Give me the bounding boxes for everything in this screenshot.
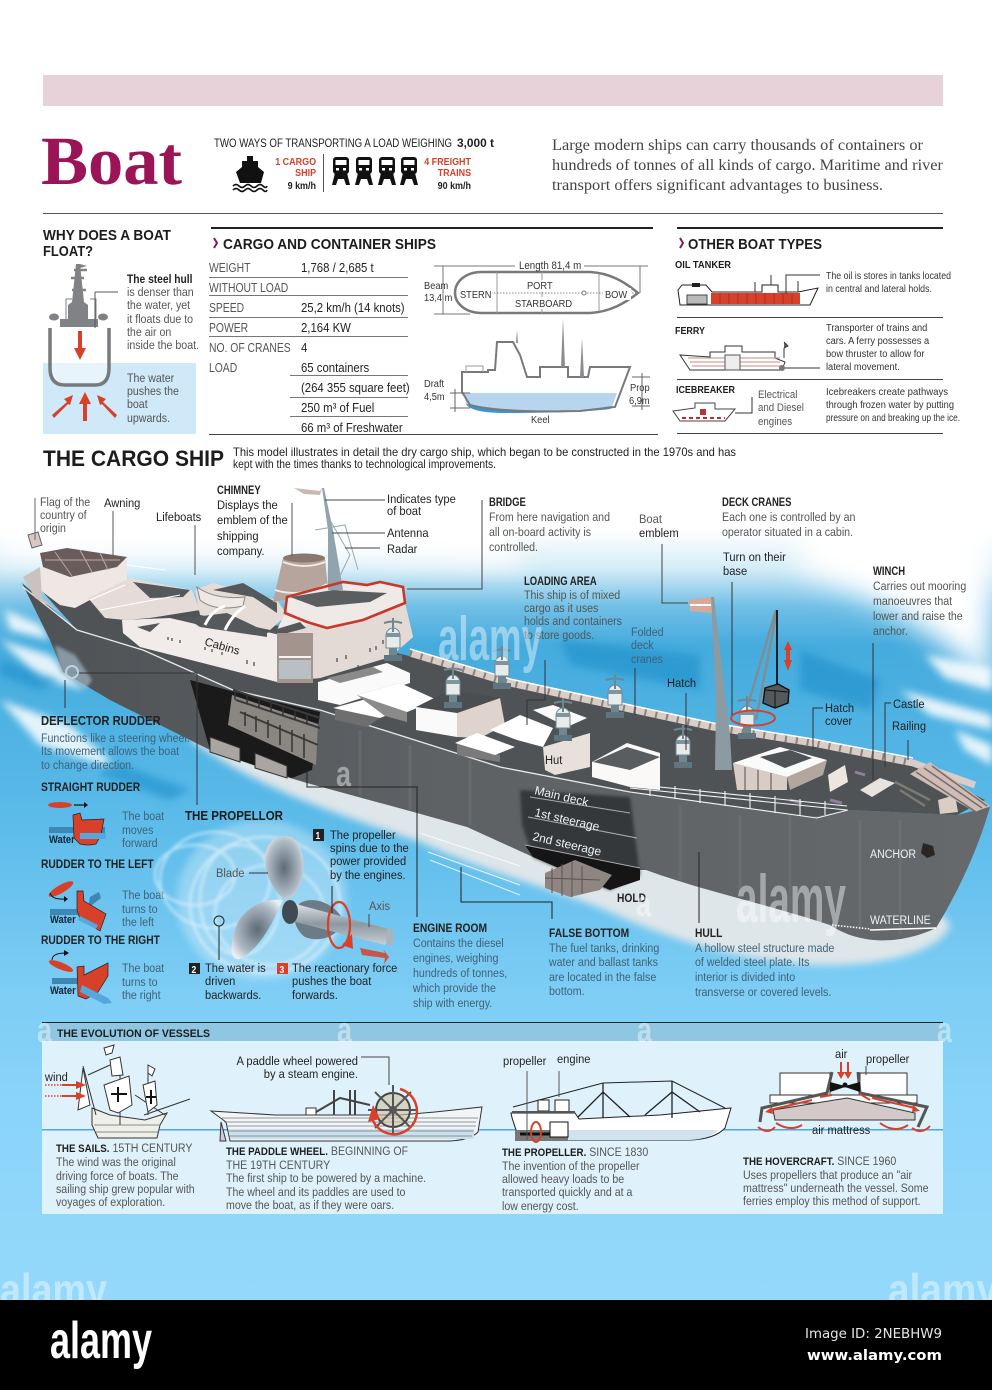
data table: 2,164 KW bbox=[301, 320, 352, 335]
icebreaker: Electrical bbox=[758, 390, 797, 401]
label: mast: Indicates type bbox=[387, 494, 456, 506]
the propellor diagram: power provided bbox=[330, 856, 406, 868]
data table: 1,768 / 2,685 t bbox=[301, 260, 374, 275]
ship plan diagram bbox=[424, 261, 648, 314]
watermarks: a bbox=[937, 1009, 953, 1050]
hull bbox=[22, 583, 990, 940]
chimney bbox=[273, 555, 328, 602]
label: hatch bbox=[667, 678, 696, 750]
foredeck bbox=[733, 747, 990, 814]
wake lines bbox=[420, 833, 520, 895]
ship plan diagram: PORT bbox=[527, 281, 553, 292]
rudder: right: RUDDER TO THE RIGHT bbox=[41, 934, 160, 947]
the propellor diagram: driven bbox=[205, 976, 235, 988]
rudder: left: Water bbox=[50, 914, 76, 926]
cargo ship intro text: This model illustrates in detail the dry cargo ship, which began to be constructed in the 1970s and has bbox=[233, 445, 736, 459]
rudder: straight bbox=[41, 781, 165, 850]
label: loading area: LOADING AREA bbox=[524, 575, 597, 588]
panel: why does a boat float: pushes the bbox=[127, 385, 179, 398]
watermarks bbox=[0, 605, 992, 1316]
label: deflector rudder: Its movement allows the boat bbox=[41, 745, 180, 758]
text: hovercraft: mattress" underneath the vessel. Some bbox=[743, 1182, 929, 1195]
ship plan diagram: 13,4 m bbox=[424, 293, 452, 304]
panel: evolution of vessels bbox=[42, 1022, 943, 1214]
pink header band bbox=[43, 75, 943, 106]
text: hovercraft: ferries employ this method of support. bbox=[743, 1195, 921, 1208]
ship wake foam bbox=[190, 720, 950, 965]
label: hull bbox=[695, 852, 834, 999]
rudder: right: the right bbox=[122, 989, 161, 1002]
main ship illustration: Cabins bbox=[203, 636, 241, 658]
label: bridge: From here navigation and bbox=[489, 511, 610, 524]
panel: why does a boat float bbox=[43, 227, 199, 434]
propeller ship bbox=[503, 1054, 731, 1142]
water text: The water bbox=[127, 372, 174, 385]
label: engine room: engines, weighing bbox=[413, 952, 498, 965]
hull text: The steel hull bbox=[127, 273, 193, 286]
oil tanker: The oil is stores in tanks located bbox=[826, 270, 951, 282]
label: false bottom bbox=[461, 867, 659, 998]
icebreaker: through frozen water by putting bbox=[826, 399, 954, 411]
intro paragraph: Large modern ships can carry thousands of containers or bbox=[552, 137, 924, 154]
panel: why does a boat float: the air on bbox=[127, 326, 171, 339]
label: folded deck cranes: Folded bbox=[631, 626, 664, 639]
text: propeller bbox=[502, 1146, 648, 1213]
label: lifeboats: Lifeboats bbox=[156, 512, 201, 524]
watermarks: alamy bbox=[0, 1264, 107, 1316]
midship blocks bbox=[318, 663, 660, 790]
transport comparison: 90 km/h bbox=[438, 180, 471, 192]
main ship illustration: ANCHOR bbox=[870, 848, 916, 861]
label: loading area: to store goods. bbox=[524, 629, 594, 642]
rudder: right: turns to bbox=[122, 976, 158, 989]
hovercraft: air mattress bbox=[812, 1125, 870, 1137]
rudder bbox=[55, 645, 92, 690]
label: chimney: emblem of the bbox=[217, 515, 288, 527]
ship side profile diagram: Prop bbox=[630, 383, 650, 394]
mast bbox=[294, 488, 322, 495]
transport comparison: 9 km/h bbox=[288, 180, 316, 192]
panel: why does a boat float: FLOAT? bbox=[43, 243, 93, 260]
main ship illustration: WATERLINE bbox=[870, 914, 931, 927]
rudder: straight: forward bbox=[122, 837, 158, 850]
label: folded deck cranes: cranes bbox=[631, 653, 663, 666]
image id: Image ID: 2NEBHW9 bbox=[805, 1327, 942, 1342]
data table: 65 containers bbox=[301, 360, 369, 375]
panel: why does a boat float: it floats due to bbox=[127, 313, 193, 326]
label: flag bbox=[28, 496, 90, 548]
bridge red outline bbox=[285, 582, 405, 628]
watermarks: a bbox=[637, 1009, 653, 1050]
aft deck bbox=[88, 578, 200, 620]
label: railing: Railing bbox=[892, 721, 926, 733]
the propellor diagram: 2 bbox=[191, 964, 196, 975]
label: hull: of welded steel plate. Its bbox=[695, 956, 810, 969]
label: hull: HULL bbox=[695, 927, 723, 940]
label: deck cranes: operator situated in a cabin. bbox=[722, 526, 853, 539]
icon: cargo ship bbox=[233, 156, 267, 192]
label: deck cranes: Each one is controlled by an bbox=[722, 511, 855, 524]
the propellor diagram: The propeller bbox=[330, 830, 396, 842]
panel: why does a boat float: upwards. bbox=[127, 412, 170, 425]
anchor bbox=[921, 843, 935, 858]
rudder: straight: STRAIGHT RUDDER bbox=[41, 781, 140, 794]
hull cutaway decks bbox=[520, 783, 640, 897]
oil tanker: OIL TANKER bbox=[675, 260, 732, 271]
text: paddle wheel: THE PADDLE WHEEL. BEGINNING OF bbox=[226, 1145, 408, 1158]
label: folded deck cranes bbox=[631, 626, 664, 715]
ship plan diagram: STERN bbox=[460, 290, 491, 301]
ship plan diagram: STARBOARD bbox=[515, 299, 572, 310]
text: hovercraft: Uses propellers that produce an "air bbox=[743, 1169, 912, 1182]
text: paddle wheel: The first ship to be powered by a machine. bbox=[226, 1172, 426, 1185]
label: folded deck cranes: deck bbox=[631, 639, 654, 652]
label: flag: Flag of the bbox=[40, 496, 90, 509]
hull cutaway decks: 1st steerage bbox=[533, 805, 601, 834]
heading: WHY DOES A BOAT bbox=[43, 227, 171, 244]
deck cranes bbox=[384, 618, 692, 768]
text: propeller: The invention of the propeller bbox=[502, 1160, 640, 1173]
sea background bbox=[0, 480, 992, 1300]
transport comparison: TRAINS bbox=[438, 167, 472, 179]
paddle steamer bbox=[211, 1056, 482, 1141]
label: false bottom: FALSE BOTTOM bbox=[549, 927, 629, 940]
lifeboat bbox=[197, 587, 245, 608]
deck bbox=[30, 578, 985, 817]
icebreaker: Icebreakers create pathways bbox=[826, 386, 948, 398]
the propellor diagram: 3 bbox=[280, 964, 284, 975]
rudder: left: turns to bbox=[122, 903, 158, 916]
engine cutaway bbox=[190, 680, 320, 778]
label: engine room: ENGINE ROOM bbox=[413, 922, 487, 935]
text: propeller: transported quickly and at a bbox=[502, 1186, 633, 1199]
ship side profile diagram: 4,5m bbox=[424, 392, 445, 403]
main ship illustration bbox=[22, 488, 990, 940]
intro paragraph: transport offers significant advantages to business. bbox=[552, 177, 883, 194]
the propellor diagram bbox=[155, 808, 409, 1002]
text: hovercraft: THE HOVERCRAFT. SINCE 1960 bbox=[743, 1155, 896, 1168]
the propellor diagram: pushes the boat bbox=[292, 976, 372, 988]
icebreaker: engines bbox=[758, 417, 792, 428]
watermarks: a bbox=[337, 1009, 353, 1050]
label: boat emblem: emblem bbox=[639, 528, 679, 540]
label: mast: of boat bbox=[387, 506, 422, 518]
label: false bottom: bottom. bbox=[549, 985, 585, 998]
ship side profile diagram: 6,9m bbox=[629, 396, 650, 407]
text: propeller: allowed heavy loads to be bbox=[502, 1173, 624, 1186]
rudder: left: The boat bbox=[122, 889, 165, 902]
label: hatch: Hatch bbox=[667, 678, 696, 690]
the propellor diagram: backwards. bbox=[205, 990, 261, 1002]
ship side profile diagram: Keel bbox=[531, 415, 550, 426]
paddle steamer: by a steam engine. bbox=[264, 1069, 358, 1081]
heading: OTHER BOAT TYPES bbox=[688, 236, 822, 253]
text: hovercraft bbox=[743, 1155, 929, 1208]
label: false bottom: water and ballast tanks bbox=[548, 956, 658, 969]
ferry: cars. A ferry possesses a bbox=[826, 336, 930, 347]
label: mast bbox=[325, 494, 456, 556]
arrows red bbox=[52, 331, 117, 421]
data table: LOAD bbox=[209, 362, 237, 375]
label: deck cranes: DECK CRANES bbox=[722, 496, 791, 509]
data table: NO. OF CRANES bbox=[209, 342, 291, 355]
label: turn on base: Turn on their bbox=[723, 552, 786, 564]
label: hut: Hut bbox=[545, 755, 563, 767]
panel: other boat types bbox=[673, 227, 960, 434]
watermarks: a bbox=[336, 753, 352, 794]
ferry: lateral movement. bbox=[826, 362, 900, 373]
propeller ship: engine bbox=[557, 1054, 590, 1066]
label: lifeboats bbox=[156, 512, 201, 575]
text: propeller: THE PROPELLER. SINCE 1830 bbox=[502, 1146, 648, 1159]
watermarks: a bbox=[636, 883, 652, 924]
the propellor diagram: 1 bbox=[316, 830, 320, 841]
transport comparison: SHIP bbox=[295, 167, 317, 179]
label: bridge: all on-board activity is bbox=[489, 526, 591, 539]
the propellor diagram: by the engines. bbox=[330, 870, 406, 882]
rotation arrow bbox=[328, 902, 350, 948]
rudder: straight: Water bbox=[49, 834, 75, 846]
upper deck bbox=[195, 583, 287, 630]
stern house bbox=[40, 560, 127, 608]
label: engine room: hundreds of tonnes, bbox=[413, 967, 507, 980]
hovercraft bbox=[758, 1049, 930, 1137]
data table: WEIGHT bbox=[209, 262, 250, 275]
label: loading area: holds and containers bbox=[524, 615, 622, 628]
hull cutaway decks: Main deck bbox=[533, 783, 591, 809]
url: www.alamy.com bbox=[807, 1348, 942, 1364]
label: flag: country of bbox=[40, 509, 87, 522]
label: false bottom: The fuel tanks, drinking bbox=[549, 942, 659, 955]
rudder: straight: moves bbox=[122, 824, 154, 837]
label: deflector rudder: DEFLECTOR RUDDER bbox=[41, 713, 161, 728]
heading: THE EVOLUTION OF VESSELS bbox=[57, 1028, 210, 1040]
label: deflector rudder: to change direction. bbox=[41, 759, 134, 772]
transport comparison: 3,000 t bbox=[457, 136, 494, 150]
ferry bbox=[675, 323, 930, 373]
text: sails: The wind was the original bbox=[56, 1156, 176, 1169]
panel: why does a boat float: boat bbox=[127, 398, 148, 411]
text: propeller: low energy cost. bbox=[502, 1200, 579, 1213]
ferry: Transporter of trains and bbox=[826, 323, 927, 334]
text: paddle wheel bbox=[226, 1145, 426, 1212]
label: winch: Carries out mooring bbox=[873, 580, 966, 593]
label: bridge: controlled. bbox=[489, 541, 538, 554]
hull railing bbox=[630, 784, 848, 818]
label: hatch cover: Hatch bbox=[825, 703, 854, 715]
bridge bbox=[285, 582, 405, 628]
data table: 66 m³ of Freshwater bbox=[301, 420, 403, 435]
label: awning bbox=[104, 498, 140, 555]
data table: 250 m³ of Fuel bbox=[301, 400, 374, 415]
label: chimney: company. bbox=[217, 546, 265, 558]
hull cutaway decks: 2nd steerage bbox=[531, 829, 603, 859]
transport comparison: 4 FREIGHT bbox=[424, 156, 471, 168]
title: Boat bbox=[41, 123, 182, 199]
ship plan diagram: BOW bbox=[605, 290, 628, 301]
paddle steamer: A paddle wheel powered bbox=[236, 1056, 358, 1068]
intro paragraph: hundreds of tonnes of all kinds of cargo. Maritime and river bbox=[552, 157, 944, 174]
data table: 25,2 km/h (14 knots) bbox=[301, 300, 405, 315]
label: loading area: cargo as it uses bbox=[524, 602, 599, 615]
data table: SPEED bbox=[209, 302, 244, 315]
cargo ship intro text: kept with the times thanks to technological improvements. bbox=[233, 457, 496, 471]
icebreaker bbox=[673, 385, 960, 428]
ship side profile diagram: Draft bbox=[424, 379, 444, 390]
label: hull: A hollow steel structure made bbox=[695, 942, 834, 955]
footer bar bbox=[0, 1300, 992, 1390]
icebreaker: and Diesel bbox=[758, 403, 804, 414]
rudder: right: The boat bbox=[122, 962, 165, 975]
label: boat emblem: Boat bbox=[639, 514, 663, 526]
the propellor diagram: The reactionary force bbox=[292, 963, 397, 975]
intro paragraph bbox=[552, 137, 944, 194]
the propellor diagram: THE PROPELLOR bbox=[185, 808, 284, 823]
text: sails bbox=[56, 1142, 195, 1209]
text: sails: voyages of exploration. bbox=[56, 1196, 165, 1209]
propeller water glow bbox=[177, 820, 347, 980]
label: turn on base bbox=[723, 552, 786, 715]
far bulwark bbox=[410, 653, 975, 785]
label: engine room: ship with energy. bbox=[413, 997, 492, 1010]
rudder: left bbox=[41, 858, 165, 931]
icebreaker: ICEBREAKER bbox=[676, 385, 736, 396]
fore mast and crane bbox=[689, 597, 792, 770]
oil tanker: in central and lateral holds. bbox=[826, 283, 932, 295]
label: boat emblem bbox=[639, 514, 688, 603]
label: hatch cover bbox=[813, 703, 854, 750]
label: turn on base: base bbox=[723, 566, 747, 578]
label: castle bbox=[885, 699, 925, 767]
text: sails: sailing ship grew popular with bbox=[56, 1183, 195, 1196]
hovercraft: propeller bbox=[866, 1054, 910, 1066]
transport comparison bbox=[214, 136, 494, 192]
data table: WITHOUT LOAD bbox=[209, 282, 288, 295]
panel: why does a boat float: inside the boat. bbox=[127, 339, 199, 352]
label: hull: interior is divided into bbox=[695, 971, 795, 984]
the propellor diagram: The water is bbox=[205, 963, 266, 975]
label: loading area bbox=[524, 575, 622, 725]
the propellor diagram: forwards. bbox=[292, 990, 338, 1002]
rudder: left: the left bbox=[122, 916, 155, 929]
label: engine room: Contains the diesel bbox=[413, 937, 504, 950]
label: mast: Antenna bbox=[387, 528, 429, 540]
cabins block bbox=[122, 603, 413, 682]
propeller ship: propeller bbox=[503, 1056, 547, 1068]
watermarks: alamy bbox=[736, 861, 846, 937]
heading: CARGO AND CONTAINER SHIPS bbox=[223, 236, 436, 253]
label: castle: Castle bbox=[893, 699, 925, 711]
label: chimney: CHIMNEY bbox=[217, 484, 261, 497]
label: deflector rudder: Functions like a steering wheel. bbox=[41, 732, 190, 745]
the propellor diagram: Axis bbox=[369, 901, 390, 913]
blades bbox=[295, 900, 342, 939]
text: paddle wheel: move the boat, as if they were oars. bbox=[226, 1199, 394, 1212]
hull diagram bbox=[49, 264, 118, 421]
data table: 4 bbox=[301, 340, 308, 355]
label: chimney bbox=[217, 484, 292, 558]
label: bridge bbox=[407, 496, 610, 589]
label: mast: Radar bbox=[387, 544, 418, 556]
heading: the cargo ship: THE CARGO SHIP bbox=[43, 446, 224, 471]
text: paddle wheel: THE 19TH CENTURY bbox=[226, 1159, 331, 1172]
hovercraft: air bbox=[835, 1049, 848, 1061]
label: engine room: which provide the bbox=[412, 982, 496, 995]
rudder: right: Water bbox=[50, 985, 76, 997]
ferry: FERRY bbox=[675, 326, 705, 337]
sailing ship: wind bbox=[44, 1072, 68, 1084]
sailing ship bbox=[44, 1045, 190, 1138]
panel: cargo and container ships bbox=[209, 227, 658, 435]
label: hatch cover: cover bbox=[825, 716, 852, 728]
text: sails: driving force of boats. The bbox=[56, 1170, 179, 1183]
label: winch: lower and raise the bbox=[873, 610, 963, 623]
icon: freight trains bbox=[332, 157, 418, 185]
text: paddle wheel: The wheel and its paddles are used to bbox=[226, 1186, 405, 1199]
ship plan diagram: Length 81,4 m bbox=[519, 261, 581, 272]
label: railing bbox=[892, 721, 926, 760]
label: engine room bbox=[307, 770, 507, 1010]
ferry: bow thruster to allow for bbox=[826, 349, 925, 360]
panel: why does a boat float: the water, yet bbox=[127, 299, 191, 312]
label: deck cranes bbox=[722, 496, 855, 539]
label: flag: origin bbox=[40, 522, 66, 535]
footer logo: alamy bbox=[50, 1312, 152, 1370]
label: bridge: BRIDGE bbox=[489, 496, 526, 509]
label: winch: manoeuvres that bbox=[873, 595, 953, 608]
label: winch: WINCH bbox=[873, 565, 905, 578]
label: winch: anchor. bbox=[873, 625, 908, 638]
data table bbox=[209, 260, 658, 435]
label: chimney: Displays the bbox=[217, 500, 278, 512]
icebreaker: pressure on and breaking up the ice. bbox=[826, 412, 960, 424]
text: sails: THE SAILS. 15TH CENTURY bbox=[56, 1142, 193, 1155]
rudder: straight: The boat bbox=[122, 810, 165, 823]
label: chimney: shipping bbox=[217, 531, 259, 543]
label: false bottom: are located in the false bbox=[549, 971, 656, 984]
ship side profile diagram bbox=[424, 318, 650, 426]
transport comparison: 1 CARGO bbox=[275, 156, 316, 168]
data table: POWER bbox=[209, 322, 248, 335]
panel: why does a boat float: is denser than bbox=[127, 286, 194, 299]
ship plan diagram: Beam bbox=[424, 281, 448, 292]
label: hull: transverse or covered levels. bbox=[695, 986, 831, 999]
transport comparison: TWO WAYS OF TRANSPORTING A LOAD WEIGHING bbox=[214, 136, 452, 150]
label: awning: Awning bbox=[104, 498, 140, 510]
awning bbox=[40, 548, 127, 577]
label: loading area: This ship is of mixed bbox=[524, 589, 620, 602]
watermarks: alamy bbox=[438, 605, 542, 674]
label: deflector rudder bbox=[41, 666, 197, 805]
callouts: Blade bbox=[216, 868, 245, 880]
the propellor diagram: spins due to the bbox=[330, 843, 409, 855]
watermarks: a bbox=[37, 1009, 53, 1050]
label: winch bbox=[873, 565, 966, 780]
rudder: right bbox=[41, 934, 165, 1004]
water swirl bbox=[155, 832, 340, 973]
data table: (264 355 square feet) bbox=[301, 380, 410, 395]
cargo ship intro text bbox=[233, 445, 736, 471]
rudder: left: RUDDER TO THE LEFT bbox=[41, 858, 154, 871]
oil tanker bbox=[675, 260, 951, 305]
label: hold: HOLD bbox=[617, 892, 646, 905]
